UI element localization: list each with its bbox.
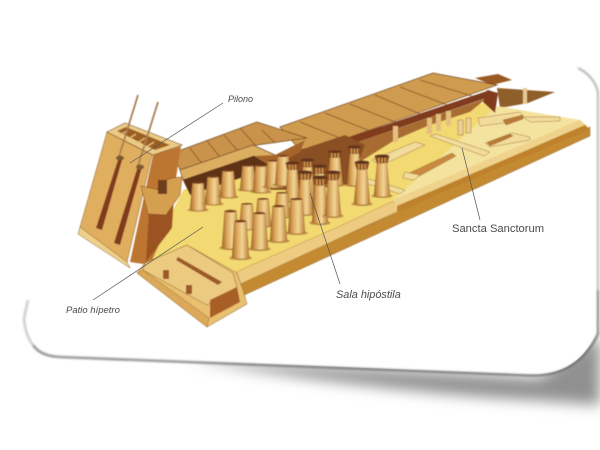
card shadow — [190, 335, 600, 405]
front gate block — [137, 245, 247, 327]
card edge — [24, 68, 598, 376]
back chamber — [475, 74, 555, 108]
card panel — [25, 57, 597, 375]
platform floor — [147, 100, 590, 295]
colonnade under roof — [188, 155, 293, 211]
flagpoles — [96, 95, 158, 245]
label: Patio hípetro: Patio hípetro — [66, 305, 120, 316]
label: Sancta Sanctorum: Sancta Sanctorum — [452, 223, 544, 235]
label: Sala hipóstila: Sala hipóstila — [336, 289, 401, 301]
label: Pilono: Pilono — [228, 94, 253, 104]
platform base band — [236, 106, 590, 297]
pylon — [78, 123, 182, 268]
temple illustration — [78, 73, 590, 327]
inner walls — [362, 112, 560, 194]
back roof — [280, 73, 498, 165]
sala hipóstila columns — [283, 145, 392, 225]
courtyard columns — [219, 192, 308, 260]
hall wall — [270, 135, 365, 190]
front roof — [173, 122, 307, 195]
leader lines — [93, 103, 480, 300]
